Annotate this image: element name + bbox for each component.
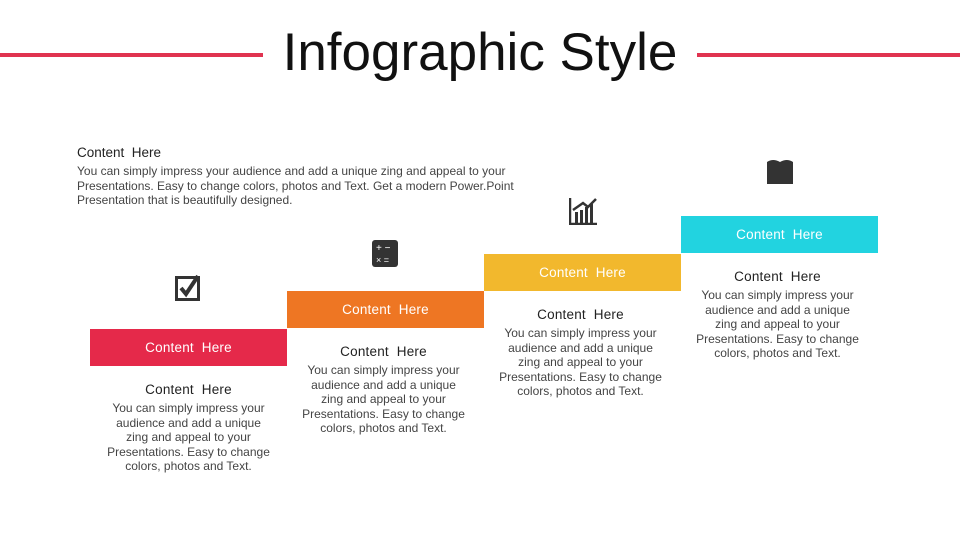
icon: book — [767, 160, 793, 184]
bar: yellow: Content Here — [539, 265, 626, 280]
title line right — [697, 53, 960, 57]
title line left — [0, 53, 263, 57]
intro text block: You can simply impress your audience and add a unique zing and appeal to your Presentations. Easy to change colors, photos and Text. Get a modern Power.Point Presentation that is beautifully designed. — [77, 164, 514, 207]
icon: calculator: + − — [376, 243, 391, 254]
column 3 text: Content Here — [537, 307, 624, 322]
title: Infographic Style — [283, 23, 677, 82]
column 3 text: You can simply impress your audience and add a unique zing and appeal to your Presentations. Easy to change colors, photos and Text. — [499, 326, 662, 398]
intro text block — [77, 145, 514, 207]
bar: orange — [287, 291, 484, 328]
icon: chart — [569, 198, 597, 225]
column 1 text: Content Here — [145, 382, 232, 397]
bar: orange: Content Here — [342, 302, 429, 317]
bar: red — [90, 329, 287, 366]
column 1 text: You can simply impress your audience and add a unique zing and appeal to your Presentations. Easy to change colors, photos and Text. — [107, 401, 270, 473]
column 2 text: You can simply impress your audience and add a unique zing and appeal to your Presentations. Easy to change colors, photos and Text. — [302, 363, 465, 435]
column 4 text: Content Here — [734, 269, 821, 284]
column 4 text: You can simply impress your audience and add a unique zing and appeal to your Presentations. Easy to change colors, photos and Text. — [696, 288, 859, 360]
icon: calculator: × = — [376, 255, 389, 265]
bar: cyan: Content Here — [736, 227, 823, 242]
intro text block: Content Here — [77, 145, 161, 160]
icon: calculator — [372, 240, 398, 267]
bar: yellow — [484, 254, 681, 291]
bar: red: Content Here — [145, 340, 232, 355]
column 2 text: Content Here — [340, 344, 427, 359]
bar: cyan — [681, 216, 878, 253]
icon: checkbox — [175, 274, 200, 301]
